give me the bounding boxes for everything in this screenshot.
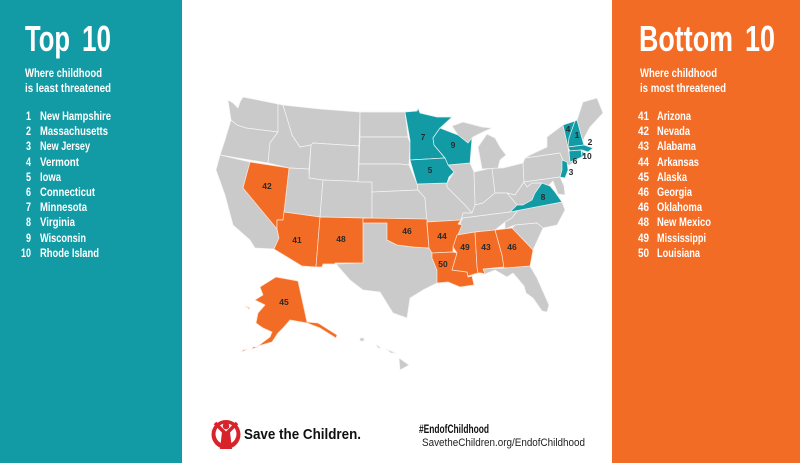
list: top 10 states: 9 bbox=[26, 231, 31, 245]
state: Arkansas, rank 44: 44 bbox=[437, 231, 447, 241]
list: bottom 10 states: 41 bbox=[638, 109, 649, 123]
state: Nevada, rank 42 bbox=[243, 162, 289, 229]
state: Massachusetts, rank 2: 2 bbox=[588, 137, 593, 147]
map: United States bbox=[216, 97, 603, 370]
state: Alaska, rank 45: 45 bbox=[279, 297, 289, 307]
list: bottom 10 states: Oklahoma bbox=[657, 200, 702, 214]
list: top 10 states: New Jersey bbox=[40, 139, 90, 153]
state: Alaska, rank 45 bbox=[242, 277, 337, 352]
list: bottom 10 states: Nevada bbox=[657, 124, 690, 138]
list: top 10 states: Rhode Island bbox=[40, 246, 99, 260]
state: New Jersey, rank 3: 3 bbox=[569, 167, 574, 177]
list: bottom 10 states: 46 bbox=[638, 200, 649, 214]
state: Arkansas, rank 44 bbox=[427, 220, 462, 253]
list: top 10 states: 4 bbox=[26, 155, 31, 169]
list: top 10 states: New Hampshire bbox=[40, 109, 111, 123]
state: Oklahoma, rank 46: 46 bbox=[402, 226, 412, 236]
list: top 10 states: 5 bbox=[26, 170, 31, 184]
list: bottom 10 states: Arkansas bbox=[657, 155, 699, 169]
list: top 10 states: 7 bbox=[26, 200, 31, 214]
state: Massachusetts, rank 2 bbox=[568, 137, 593, 152]
state: Minnesota, rank 7: 7 bbox=[421, 132, 426, 142]
hashtag: #EndofChildhood bbox=[419, 424, 489, 436]
state: Nevada, rank 42: 42 bbox=[262, 181, 272, 191]
state: Connecticut, rank 6 bbox=[569, 150, 582, 166]
heading: Bottom 10: Bottom bbox=[639, 18, 733, 59]
logo: Save the Children bbox=[212, 420, 361, 449]
subheading: least threatened: is least threatened bbox=[25, 81, 111, 95]
list: bottom 10 states: 42 bbox=[638, 124, 649, 138]
list: bottom 10 states: Alaska bbox=[657, 170, 687, 184]
state: Alabama, rank 43 bbox=[475, 230, 504, 274]
subheading: least threatened: Where childhood bbox=[25, 66, 102, 80]
state: New Hampshire, rank 1: 1 bbox=[575, 130, 580, 140]
state: Iowa, rank 5: 5 bbox=[428, 165, 433, 175]
list: top 10 states: 2 bbox=[26, 124, 31, 138]
list: top 10 states: Connecticut bbox=[40, 185, 95, 199]
state: Iowa, rank 5 bbox=[410, 158, 454, 184]
list: top 10 states: 1 bbox=[26, 109, 31, 123]
state: Arizona, rank 41: 41 bbox=[292, 235, 302, 245]
list: bottom 10 states: Mississippi bbox=[657, 231, 706, 245]
state: Wisconsin, rank 9 bbox=[433, 128, 472, 165]
list: top 10 states: Massachusetts bbox=[40, 124, 108, 138]
state: Louisiana, rank 50: 50 bbox=[438, 259, 448, 269]
list: top 10 states: Iowa bbox=[40, 170, 61, 184]
list: top 10 states: Virginia bbox=[40, 215, 75, 229]
subheading: least threatened bbox=[25, 66, 111, 95]
state: Vermont, rank 4 bbox=[563, 121, 575, 147]
list: top 10 states: 10 bbox=[21, 246, 31, 260]
list: top 10 states: 8 bbox=[26, 215, 31, 229]
map: unranked grey states bbox=[216, 97, 603, 370]
list: top 10 states: Minnesota bbox=[40, 200, 87, 214]
panel: bottom 10 bbox=[612, 0, 800, 463]
list: top 10 states: Wisconsin bbox=[40, 231, 86, 245]
list: top 10 states bbox=[21, 109, 111, 260]
subheading: most threatened bbox=[640, 66, 726, 95]
list: bottom 10 states: 45 bbox=[638, 170, 649, 184]
list: bottom 10 states: Louisiana bbox=[657, 246, 700, 260]
website: SavetheChildren.org/EndofChildhood bbox=[422, 437, 585, 449]
state: New Jersey, rank 3 bbox=[560, 160, 574, 178]
heading: Top 10: Top bbox=[25, 18, 70, 59]
list: bottom 10 states: Georgia bbox=[657, 185, 692, 199]
state: Virginia, rank 8 bbox=[510, 183, 562, 212]
list: bottom 10 states: Alabama bbox=[657, 139, 696, 153]
state: Mississippi, rank 49: 49 bbox=[460, 242, 470, 252]
state: New Mexico, rank 48 bbox=[316, 217, 363, 267]
state: Vermont, rank 4: 4 bbox=[566, 124, 571, 134]
logo wordmark: Save the Children. bbox=[244, 426, 361, 443]
state: Arizona, rank 41 bbox=[274, 212, 320, 267]
list: top 10 states: 3 bbox=[26, 139, 31, 153]
icon: child with raised arms bbox=[212, 420, 240, 449]
list: top 10 states: Vermont bbox=[40, 155, 79, 169]
list: bottom 10 states bbox=[638, 109, 711, 260]
state: Rhode Island, rank 10: 10 bbox=[582, 151, 592, 161]
state: Virginia, rank 8: 8 bbox=[541, 192, 546, 202]
list: bottom 10 states: 49 bbox=[638, 231, 649, 245]
state: Wisconsin, rank 9: 9 bbox=[451, 140, 456, 150]
panel: top 10 bbox=[0, 0, 182, 463]
list: bottom 10 states: 48 bbox=[638, 215, 649, 229]
state: Georgia, rank 46 bbox=[495, 228, 533, 268]
state: Oklahoma, rank 46 bbox=[363, 218, 429, 248]
list: bottom 10 states: 46 bbox=[638, 185, 649, 199]
list: bottom 10 states: 43 bbox=[638, 139, 649, 153]
state: New Hampshire, rank 1 bbox=[568, 120, 584, 147]
heading: Top 10: 10 bbox=[82, 18, 111, 59]
list: bottom 10 states: Arizona bbox=[657, 109, 691, 123]
heading: Bottom 10: 10 bbox=[745, 18, 775, 59]
state: Louisiana, rank 50 bbox=[432, 252, 474, 287]
subheading: most threatened: Where childhood bbox=[640, 66, 717, 80]
list: bottom 10 states: 50 bbox=[638, 246, 649, 260]
list: bottom 10 states: 44 bbox=[638, 155, 649, 169]
list: bottom 10 states: New Mexico bbox=[657, 215, 711, 229]
state: Connecticut, rank 6: 6 bbox=[573, 156, 578, 166]
state: Alabama, rank 43: 43 bbox=[481, 242, 491, 252]
subheading: most threatened: is most threatened bbox=[640, 81, 726, 95]
state: Minnesota, rank 7 bbox=[405, 108, 452, 160]
state: New Mexico, rank 48: 48 bbox=[336, 234, 346, 244]
state: Georgia, rank 46: 46 bbox=[507, 242, 517, 252]
list: top 10 states: 6 bbox=[26, 185, 31, 199]
state: Mississippi, rank 49 bbox=[452, 232, 478, 276]
